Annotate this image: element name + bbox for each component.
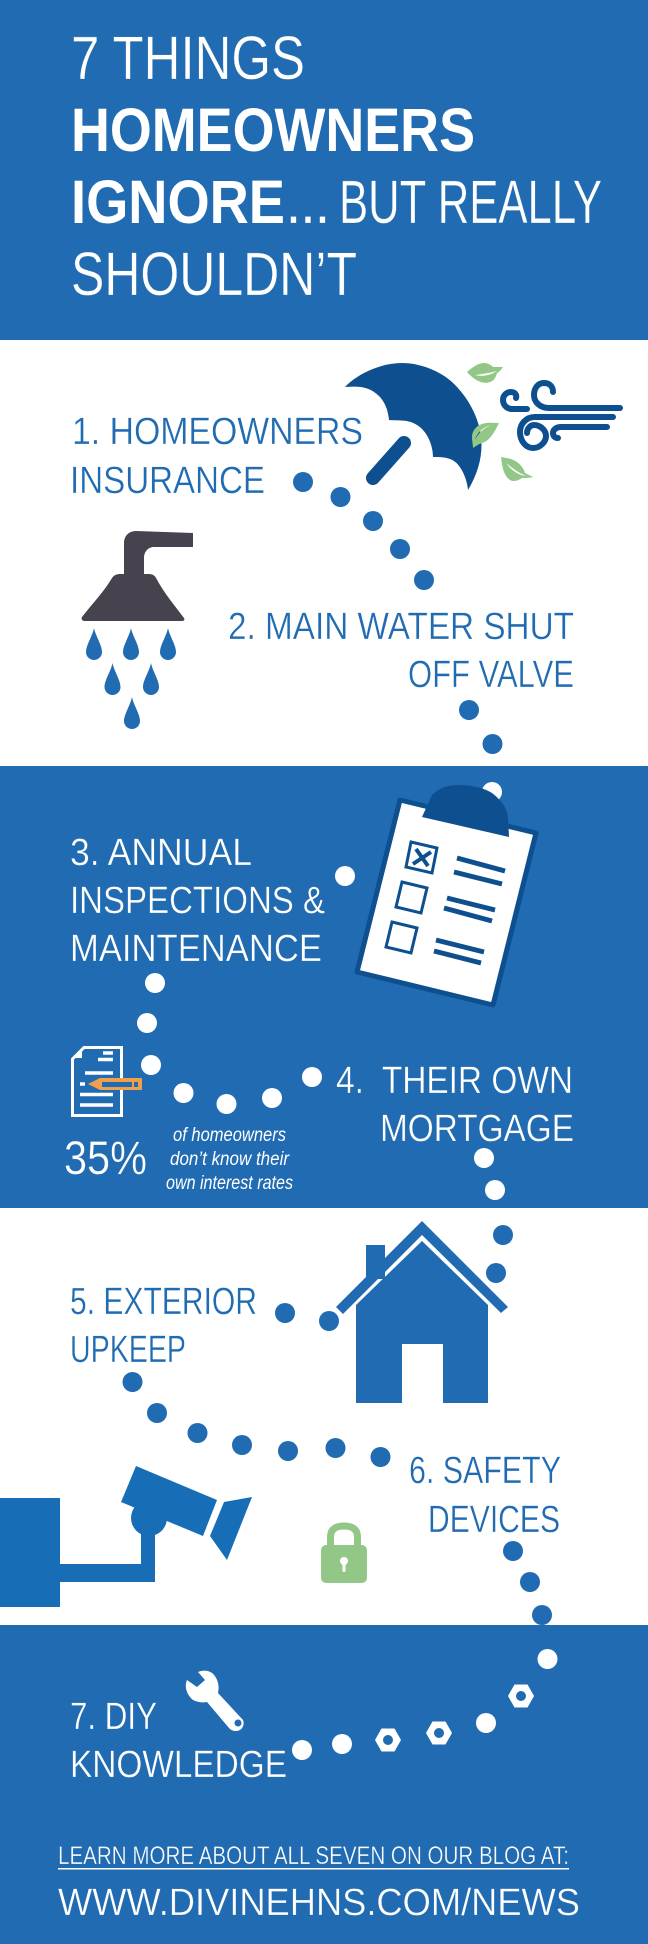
title — [71, 24, 602, 308]
heading: item 2 — [228, 606, 574, 696]
heading: item 4: 4. THEIR OWN — [336, 1060, 573, 1102]
dotted path: white dots, upper blue panel — [137, 782, 505, 1200]
heading: item 7 — [70, 1696, 287, 1786]
heading: item 3 — [70, 832, 325, 970]
heading: item 5: 5. EXTERIOR — [70, 1281, 257, 1323]
text block: statistic caption: own interest rates — [166, 1173, 293, 1194]
panel: items 3 and 4 — [0, 766, 648, 1208]
heading: item 2: OFF VALVE — [408, 654, 574, 696]
panel: items 5 and 6 — [0, 1208, 648, 1625]
heading: item 6 — [409, 1450, 561, 1541]
icon: clipboard checklist — [357, 785, 536, 1005]
text block: statistic caption: of homeowners — [173, 1125, 286, 1146]
heading: item 4 — [336, 1060, 574, 1150]
icon: house — [336, 1221, 508, 1403]
heading: item 7: 7. DIY — [70, 1696, 157, 1738]
heading: item 2: 2. MAIN WATER SHUT — [228, 606, 574, 648]
heading: item 1: INSURANCE — [70, 460, 265, 502]
heading: item 6: 6. SAFETY — [409, 1450, 561, 1492]
panel: item 7 and footer — [0, 1625, 648, 1944]
icon: wind and leaves — [467, 363, 620, 481]
heading: item 5: UPKEEP — [70, 1329, 186, 1371]
dotted path: blue dots, upper white panel — [293, 472, 502, 754]
heading: item 3: MAINTENANCE — [70, 928, 322, 970]
title: 7 THINGS — [71, 24, 305, 92]
icon: document with pencil — [72, 1048, 142, 1116]
statistic: 35 percent: 35% — [64, 1131, 147, 1184]
text block: statistic caption — [166, 1125, 293, 1194]
panel: items 1 and 2 — [0, 340, 648, 766]
heading: item 4: MORTGAGE — [380, 1108, 574, 1150]
icon: umbrella — [345, 363, 482, 490]
title: ... — [285, 168, 331, 236]
title: IGNORE — [71, 168, 285, 236]
heading: item 1: 1. HOMEOWNERS — [72, 411, 363, 453]
dotted path: white dots and hex nuts, bottom panel — [292, 1649, 558, 1760]
heading: item 3: INSPECTIONS & — [70, 880, 325, 922]
heading: item 5 — [70, 1281, 257, 1371]
heading: item 6: DEVICES — [428, 1499, 560, 1541]
icon: padlock — [321, 1526, 367, 1583]
title: SHOULDN’T — [71, 240, 357, 308]
icon: wrench — [186, 1671, 244, 1731]
heading: item 7: KNOWLEDGE — [70, 1744, 287, 1786]
heading: item 1 — [70, 411, 363, 502]
panel: title banner — [0, 0, 648, 340]
icon: security camera — [0, 1466, 252, 1607]
title: HOMEOWNERS — [71, 96, 475, 164]
text block: statistic caption: don’t know their — [170, 1149, 290, 1170]
dotted path: blue dots, lower white panel — [122, 1225, 552, 1625]
footer: website address: WWW.DIVINEHNS.COM/NEWS — [58, 1882, 580, 1924]
icon: shower head — [82, 531, 193, 729]
heading: item 3: 3. ANNUAL — [70, 832, 252, 874]
